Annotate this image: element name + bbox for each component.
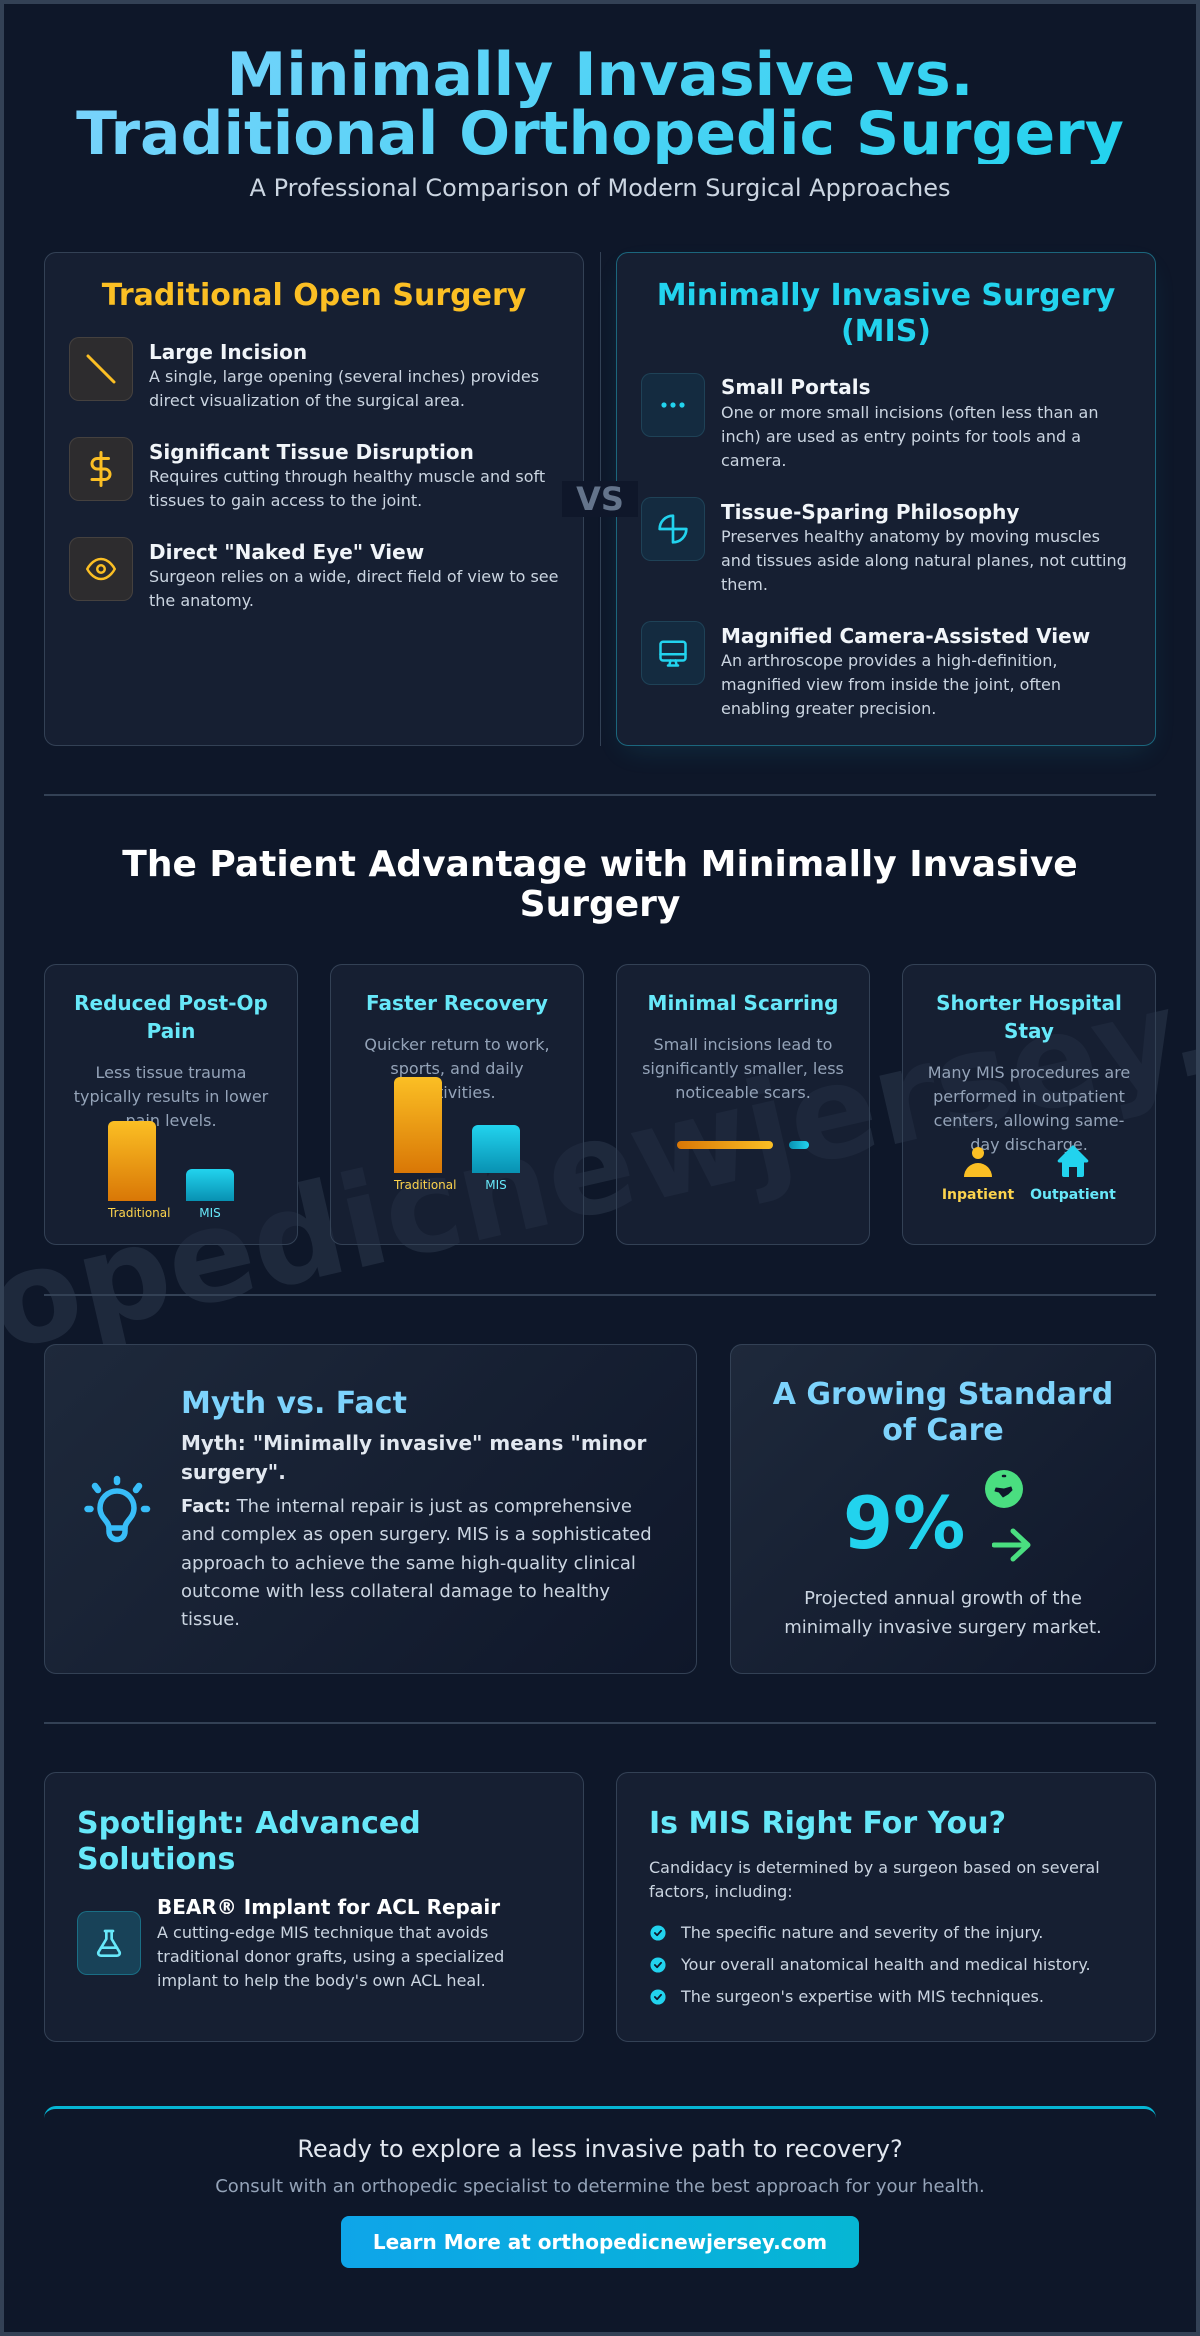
spotlight text: traditional donor grafts, using a specialized: [157, 1947, 504, 1966]
icon: lightbulb: [84, 1476, 150, 1542]
intro text: [649, 1858, 1100, 1901]
item text: magnified view: [721, 651, 1061, 718]
bar: mis: [186, 1169, 234, 1201]
item text: small portals: inch) are used as entry points for tools and a: [721, 427, 1081, 446]
card text: [74, 1063, 268, 1130]
heading: growing standard: A Growing Standard: [773, 1377, 1113, 1412]
card: minimal scarring: [616, 964, 870, 1245]
label: outpatient: Outpatient: [1030, 1187, 1116, 1203]
intro text: Candidacy is determined by a surgeon based on several: [649, 1858, 1100, 1877]
item title: large incision: Large Incision: [149, 340, 307, 364]
icon: green badge: [985, 1470, 1023, 1508]
bar label: traditional: Traditional: [394, 1178, 456, 1192]
checklist text: The specific nature and severity of the injury.: [681, 1923, 1043, 1942]
item title: tissue sparing: Tissue-Sparing Philosophy: [721, 500, 1019, 524]
card title: [936, 991, 1122, 1043]
intro text: factors, including:: [649, 1882, 793, 1901]
icon: portals: [641, 373, 705, 437]
card: reduced pain: [44, 964, 298, 1245]
divider: [44, 794, 1156, 796]
card title: Minimal Scarring: [648, 991, 838, 1015]
heading: spotlight: Solutions: [77, 1842, 235, 1877]
fact statement: approach to achieve the same high-quality clinical: [181, 1553, 636, 1574]
item text: tissue disruption: Requires cutting through healthy muscle and soft: [149, 467, 545, 486]
card text: significantly smaller, less: [642, 1059, 844, 1078]
divider: [44, 1294, 1156, 1296]
spotlight text: implant to help the body's own ACL heal.: [157, 1971, 486, 1990]
card text: Many MIS procedures are: [928, 1063, 1130, 1082]
icon: dollar: [69, 437, 133, 501]
card text: typically results in lower: [74, 1087, 268, 1106]
heading: growing standard: [772, 1377, 1113, 1448]
bar: mis: [472, 1125, 520, 1173]
icon: flask: [77, 1911, 141, 1975]
label: inpatient: Inpatient: [942, 1187, 1014, 1203]
card text: activities.: [418, 1083, 496, 1102]
section heading: patient advantage: Surgery: [520, 884, 680, 925]
panel: growing standard: [730, 1344, 1156, 1674]
myth statement: surgery".: [181, 1460, 286, 1484]
checklist item: [650, 1987, 1044, 2006]
panel: is mis right for you: [616, 1772, 1156, 2042]
item title: tissue disruption: Significant Tissue Disruption: [149, 440, 474, 464]
bar: traditional: [394, 1077, 442, 1173]
card text: [928, 1063, 1130, 1154]
panel: myth vs fact: [44, 1344, 697, 1674]
fact statement: and complex as open surgery. MIS is a sophisticated: [181, 1524, 652, 1545]
item text: large incision: direct visualization of the surgical area.: [149, 391, 465, 410]
fact statement: tissue.: [181, 1609, 240, 1630]
panel: minimally invasive surgery: [616, 252, 1156, 746]
checklist item: [650, 1955, 1091, 1974]
stat caption: minimally invasive surgery market.: [784, 1616, 1102, 1638]
section heading: patient advantage: The Patient Advantage with Minimally Invasive: [122, 844, 1078, 885]
bar label: mis: MIS: [485, 1178, 507, 1192]
icon: house: [1058, 1145, 1088, 1177]
card text: performed in outpatient: [933, 1087, 1125, 1106]
stat caption: Projected annual growth of the: [804, 1588, 1082, 1609]
heading: growing standard: of Care: [882, 1413, 1004, 1448]
card title: [74, 991, 268, 1043]
bar label: mis: MIS: [199, 1206, 221, 1220]
icon: check: [650, 1926, 666, 1940]
scar: mis: [789, 1141, 809, 1149]
scar: traditional: [677, 1141, 773, 1149]
card title: Stay: [1004, 1019, 1054, 1043]
heading: right for you: Is MIS Right For You?: [649, 1806, 1006, 1841]
icon: camera monitor: [641, 621, 705, 685]
card title: Pain: [147, 1019, 195, 1043]
vs badge: [562, 481, 638, 517]
item title: small portals: Small Portals: [721, 375, 870, 399]
spotlight text: A cutting-edge MIS technique that avoids: [157, 1923, 488, 1942]
card text: Less tissue trauma: [96, 1063, 246, 1082]
spotlight text: [157, 1923, 504, 1990]
card text: noticeable scars.: [675, 1083, 811, 1102]
title: Minimally Invasive vs.: [227, 40, 973, 110]
title: [75, 46, 1125, 164]
card title: Faster Recovery: [366, 991, 548, 1015]
button: Learn More at orthopedicnewjersey.com: [373, 2230, 827, 2254]
card: shorter hospital stay: [902, 964, 1156, 1245]
panel: traditional open surgery: [44, 252, 584, 746]
item text: large incision: [149, 367, 539, 410]
icon: eye: [69, 537, 133, 601]
title: Traditional Orthopedic Surgery: [76, 99, 1124, 169]
heading: mis: (MIS): [841, 314, 931, 349]
card text: [364, 1035, 550, 1102]
myth statement: [181, 1431, 646, 1484]
button: [341, 2216, 859, 2268]
subtitle: A Professional Comparison of Modern Surgical Approaches: [250, 174, 950, 202]
stat caption: [784, 1588, 1102, 1638]
vs badge: VS: [576, 480, 624, 518]
card text: pain levels.: [125, 1111, 217, 1130]
card text: day discharge.: [970, 1135, 1088, 1154]
item text: naked eye: the anatomy.: [149, 591, 254, 610]
fact statement: Fact: The internal repair is just as comprehensive: [181, 1496, 632, 1517]
vertical divider: [600, 252, 601, 746]
icon: check: [650, 1958, 666, 1972]
fact statement: outcome with less collateral damage to healthy: [181, 1581, 610, 1602]
fact statement: [181, 1496, 652, 1630]
card title: Reduced Post-Op: [74, 991, 268, 1015]
heading: spotlight: [77, 1806, 421, 1877]
panel: spotlight: [44, 1772, 584, 2042]
item text: magnified view: An arthroscope provides a high-definition,: [721, 651, 1057, 670]
heading: mis: [657, 278, 1115, 349]
icon: tissue sparing: [641, 497, 705, 561]
checklist text: The surgeon's expertise with MIS techniques.: [681, 1987, 1044, 2006]
item text: naked eye: Surgeon relies on a wide, direct field of view to see: [149, 567, 558, 586]
card: faster recovery: [330, 964, 584, 1245]
stat: nine percent: 9%: [843, 1481, 965, 1565]
icon: check: [650, 1990, 666, 2004]
checklist text: Your overall anatomical health and medical history.: [681, 1955, 1091, 1974]
item text: tissue sparing: and tissues aside along natural planes, not cutting: [721, 551, 1127, 570]
heading: mis: Minimally Invasive Surgery: [657, 278, 1115, 313]
section heading: patient advantage: [122, 844, 1078, 925]
spotlight title: BEAR® Implant for ACL Repair: [157, 1895, 500, 1919]
heading: traditional: Traditional Open Surgery: [102, 278, 526, 313]
item text: small portals: camera.: [721, 451, 786, 470]
card text: Quicker return to work,: [364, 1035, 550, 1054]
item title: naked eye: Direct "Naked Eye" View: [149, 540, 424, 564]
icon: incision: [69, 337, 133, 401]
item text: tissue disruption: [149, 467, 545, 510]
item text: tissue sparing: [721, 527, 1127, 594]
item text: magnified view: enabling greater precision.: [721, 699, 936, 718]
item text: small portals: [721, 403, 1098, 470]
item text: magnified view: magnified view from inside the joint, often: [721, 675, 1061, 694]
call to action: [44, 2106, 1156, 2294]
heading: myth vs fact: Myth vs. Fact: [181, 1386, 407, 1421]
myth statement: Myth: "Minimally invasive" means "minor: [181, 1431, 646, 1455]
item text: large incision: A single, large opening (several inches) provides: [149, 367, 539, 386]
icon: arrow: [992, 1528, 1030, 1562]
card text: centers, allowing same-: [934, 1111, 1124, 1130]
heading: spotlight: Spotlight: Advanced: [77, 1806, 421, 1841]
item text: tissue disruption: tissues to gain access to the joint.: [149, 491, 422, 510]
item text: tissue sparing: Preserves healthy anatomy by moving muscles: [721, 527, 1100, 546]
card text: [642, 1035, 844, 1102]
card text: Small incisions lead to: [654, 1035, 832, 1054]
item title: magnified view: Magnified Camera-Assisted View: [721, 624, 1090, 648]
checklist item: [650, 1923, 1043, 1942]
item text: tissue sparing: them.: [721, 575, 768, 594]
divider: [44, 1722, 1156, 1724]
card title: Shorter Hospital: [936, 991, 1122, 1015]
item text: small portals: One or more small incisions (often less than an: [721, 403, 1098, 422]
card text: sports, and daily: [390, 1059, 524, 1078]
icon: person: [964, 1147, 992, 1177]
bar: traditional: [108, 1121, 156, 1201]
cta heading: Ready to explore a less invasive path to recovery?: [297, 2135, 903, 2163]
item text: naked eye: [149, 567, 558, 610]
cta text: Consult with an orthopedic specialist to determine the best approach for your health.: [215, 2176, 985, 2197]
bar label: traditional: Traditional: [108, 1206, 170, 1220]
